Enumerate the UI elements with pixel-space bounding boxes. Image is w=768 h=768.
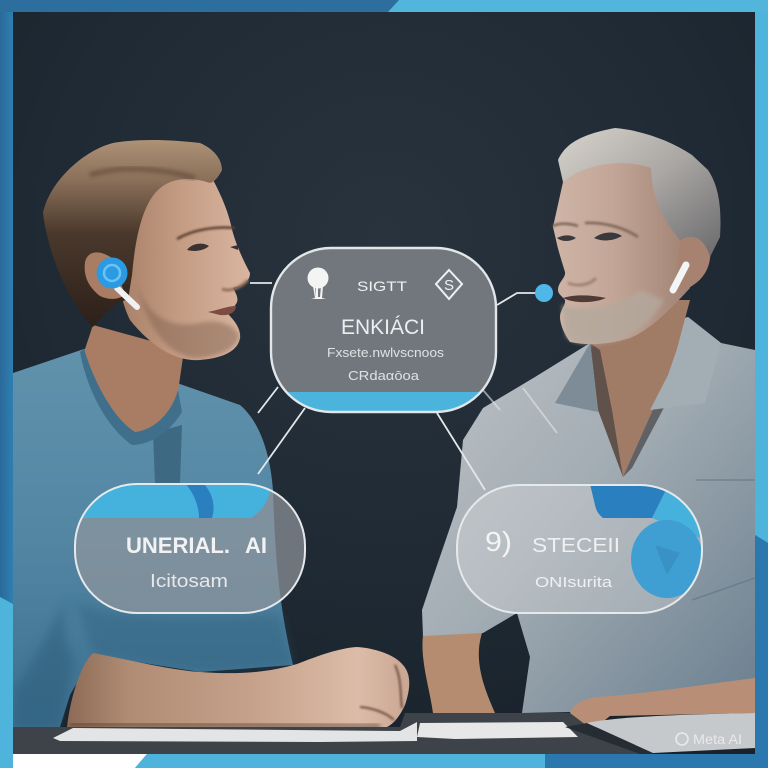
right man mouth — [563, 295, 606, 302]
left man nose shadow — [222, 280, 248, 290]
left man sleeve shadow — [13, 590, 75, 727]
left man collar — [80, 349, 182, 445]
right card title: STECEII — [532, 535, 620, 557]
right man hair — [558, 128, 720, 257]
right man pocket — [692, 480, 755, 600]
right man earbud — [673, 265, 686, 290]
left man hair — [43, 140, 222, 327]
notebook dark edge — [565, 723, 655, 754]
left man torso shadow — [76, 600, 293, 672]
frame bottom dark band — [545, 754, 755, 768]
table — [13, 713, 640, 754]
right man hand and forearm — [570, 678, 755, 728]
right man left collar — [555, 343, 598, 412]
connector lines — [250, 283, 557, 490]
right card subtitle: ONIsurita — [535, 574, 613, 591]
right man right collar — [650, 317, 721, 410]
right man shirt — [422, 317, 755, 713]
right man neck — [590, 300, 690, 477]
notebook — [565, 713, 755, 754]
right card icon glyph: 9) — [485, 526, 512, 557]
icon: person glyph — [308, 268, 328, 299]
panel: left card — [70, 480, 305, 613]
left card title: UNERIAL. — [126, 533, 230, 558]
right man brows — [553, 223, 638, 237]
panel: center card — [265, 248, 505, 416]
right card blue shapes — [590, 484, 705, 598]
left man arm shadow — [70, 724, 380, 726]
icon: diamond badge — [436, 270, 462, 299]
right man nose shadow — [568, 278, 596, 285]
left man face — [115, 165, 250, 360]
right man forearm — [422, 630, 495, 713]
frame bottom light band — [135, 754, 545, 768]
node dot — [535, 284, 553, 302]
watermark: Meta AI: Meta AI — [693, 732, 742, 747]
left man eyes — [187, 244, 238, 251]
frame left light band — [0, 597, 13, 768]
left man forearm and hand — [67, 647, 409, 729]
frame top light band — [388, 0, 768, 12]
left man ear — [85, 252, 125, 299]
center card label: SIGTT — [357, 278, 408, 294]
right man ear — [675, 235, 710, 293]
icon: left earbud — [96, 258, 137, 307]
left card blue header — [83, 485, 270, 518]
person: right man — [422, 128, 755, 728]
icon: diamond badge: S — [444, 277, 454, 294]
left paper sheet — [53, 722, 417, 742]
right man neck shadow — [590, 343, 668, 477]
center card blue band — [288, 392, 479, 411]
left man sweater placket — [153, 425, 182, 483]
frame bottom white band — [13, 754, 147, 768]
frame right dark band — [755, 535, 768, 768]
left man finger creases — [360, 665, 402, 720]
frame right light band — [755, 12, 768, 543]
left man neck — [84, 325, 184, 432]
center card subtitle: Fxsete.nwlvscnoos — [327, 346, 444, 360]
left man sweater — [13, 349, 293, 727]
right man eyes — [557, 232, 622, 241]
person: left man — [13, 140, 409, 729]
left man brow — [177, 227, 235, 239]
left card subtitle: Icitosam — [150, 571, 228, 591]
right paper sheet — [417, 722, 578, 739]
frame left dark band — [0, 12, 13, 604]
left card title: AI — [245, 533, 267, 558]
notebook cover — [587, 713, 755, 753]
center card caption: CRdaαōoa — [348, 368, 420, 383]
center card title: ENKIÁCI — [341, 316, 425, 339]
papers on table — [53, 722, 578, 742]
left man hair parting — [90, 169, 195, 178]
left man beard — [137, 285, 239, 358]
left man mouth — [208, 306, 236, 315]
right man face — [553, 152, 690, 344]
panel: right card — [457, 484, 705, 613]
right man beard — [562, 290, 664, 344]
frame top dark band — [0, 0, 399, 12]
watermark: Meta AI — [676, 732, 742, 747]
